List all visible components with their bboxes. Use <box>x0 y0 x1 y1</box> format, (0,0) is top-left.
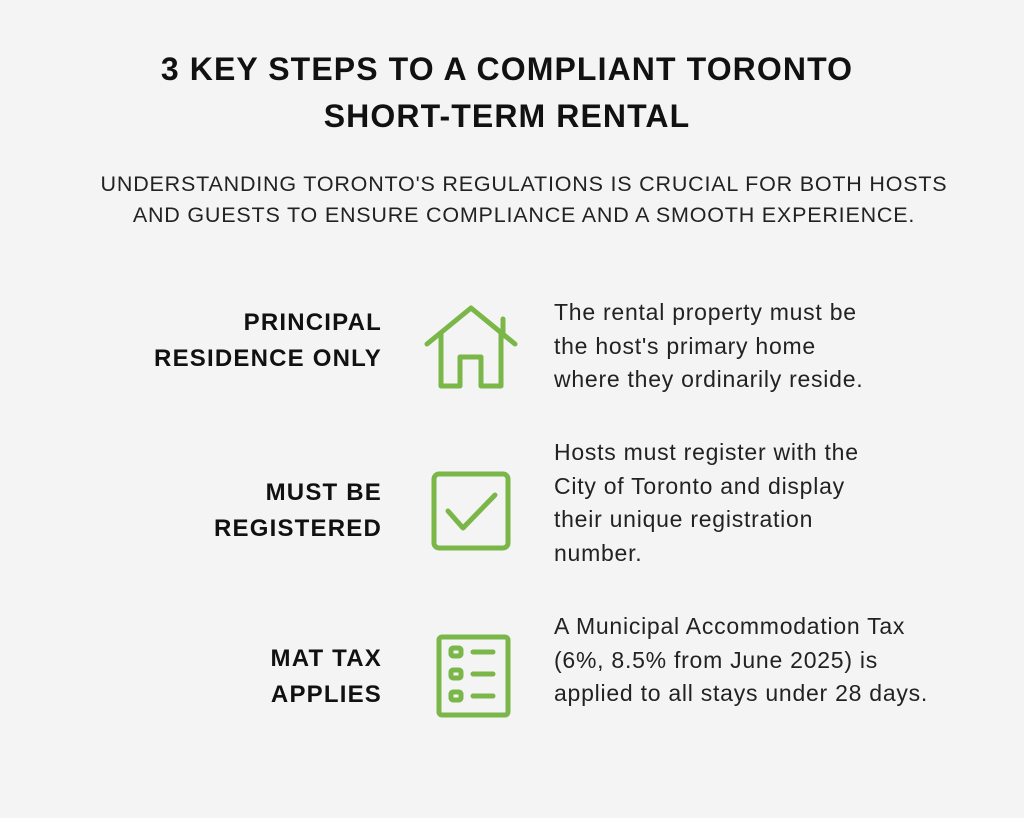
label: principal residence <box>154 309 382 372</box>
description: MAT tax: applied to all stays under 28 days. <box>554 680 928 706</box>
label: MAT tax <box>270 645 382 708</box>
label: registered <box>214 479 382 542</box>
description: principal residence: where they ordinarily reside. <box>554 366 863 392</box>
description: registered: City of Toronto and display <box>554 472 845 498</box>
title: SHORT-TERM RENTAL <box>324 98 690 134</box>
description: registered: number. <box>554 540 642 566</box>
description: MAT tax: A Municipal Accommodation Tax <box>554 613 905 639</box>
description: principal residence: The rental property must be <box>554 299 857 325</box>
label: principal residence: PRINCIPAL <box>244 309 382 336</box>
subtitle: AND GUESTS TO ENSURE COMPLIANCE AND A SMOOTH EXPERIENCE. <box>133 203 915 227</box>
description: MAT tax <box>554 613 928 706</box>
description: principal residence: the host's primary home <box>554 332 816 358</box>
label: registered: REGISTERED <box>214 515 382 542</box>
description: registered: Hosts must register with the <box>554 439 859 465</box>
description: registered: their unique registration <box>554 506 813 532</box>
label: registered: MUST BE <box>266 479 382 506</box>
label: MAT tax: APPLIES <box>271 681 382 708</box>
description: registered <box>554 439 859 566</box>
subtitle <box>101 172 947 227</box>
title: 3 KEY STEPS TO A COMPLIANT TORONTO <box>161 51 853 87</box>
description: MAT tax: (6%, 8.5% from June 2025) is <box>554 646 878 672</box>
description: principal residence <box>554 299 863 392</box>
subtitle: UNDERSTANDING TORONTO'S REGULATIONS IS CRUCIAL FOR BOTH HOSTS <box>101 172 947 196</box>
title <box>161 51 853 134</box>
label: principal residence: RESIDENCE ONLY <box>154 345 382 372</box>
label: MAT tax: MAT TAX <box>270 645 382 672</box>
